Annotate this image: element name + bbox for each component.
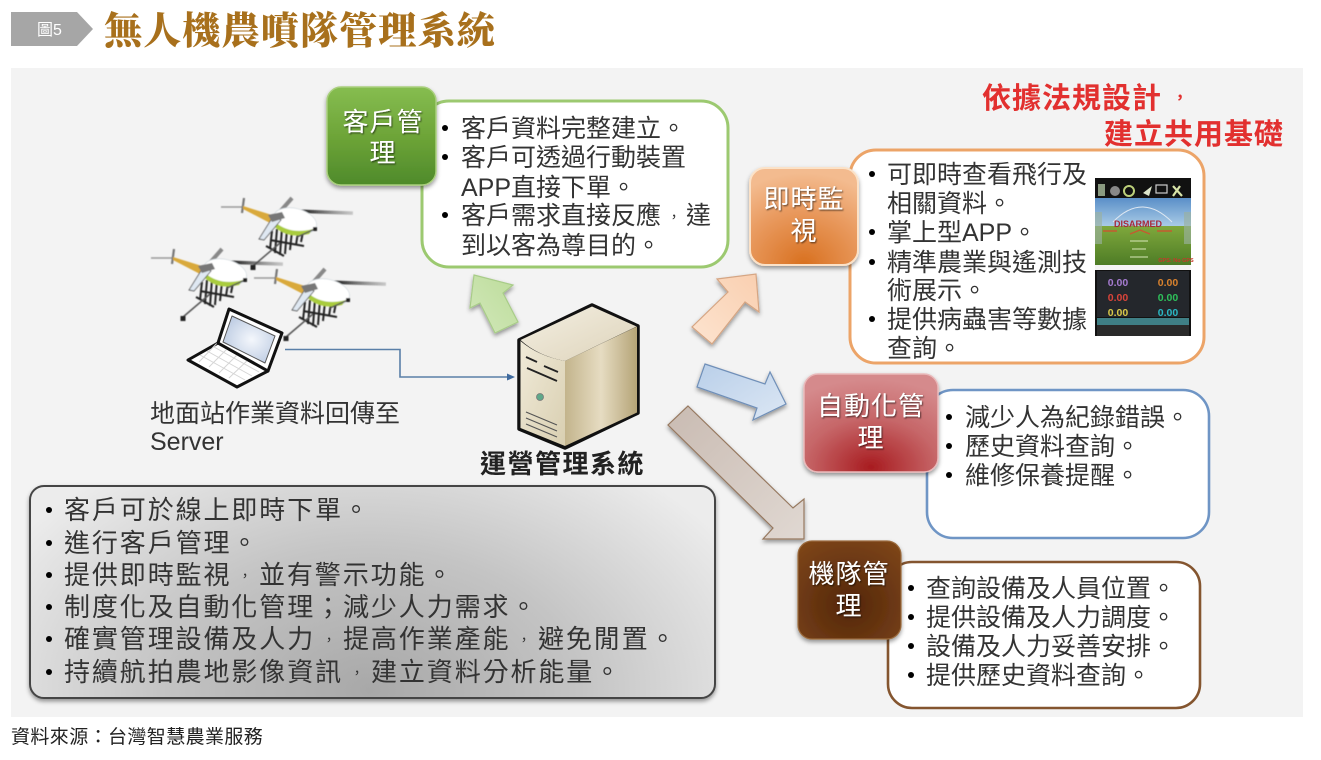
panel: system benefits: 提供即時監視 <box>64 560 231 590</box>
content box: fleet bullets: 設備及人力妥善安排。 <box>926 633 1176 661</box>
panel: system benefits: ， <box>350 665 364 681</box>
panel: system benefits: 提高作業產能 <box>343 624 510 654</box>
content box: customer bullets: APP直接下單。 <box>461 174 636 202</box>
app screenshot: GPS: No GPS <box>1158 258 1194 264</box>
panel: system benefits: 制度化及自動化管理；減少人力需求。 <box>64 592 538 622</box>
icon: drone 2 <box>151 249 283 321</box>
red note: regulation-based design: 建立共用基礎 <box>1104 118 1284 151</box>
app screenshot: 0.00 <box>1158 292 1178 304</box>
icon: server <box>519 305 638 448</box>
app screenshot <box>1095 178 1194 336</box>
content box: customer bullets <box>422 101 728 267</box>
panel: system benefits: 持續航拍農地影像資訊 <box>64 657 343 687</box>
panel: automated management <box>804 374 1209 538</box>
header: fleet management: 理 <box>835 591 863 621</box>
red note: regulation-based design: ， <box>1172 90 1188 107</box>
panel: system benefits: 確實管理設備及人力 <box>64 624 315 654</box>
source note: 資料來源：台灣智慧農業服務 <box>11 726 263 748</box>
title: 無人機農噴隊管理系統 <box>104 10 499 53</box>
app screenshot: 0.00 <box>1108 292 1128 304</box>
header: real-time monitoring: 即時監 <box>763 184 845 214</box>
figure badge <box>11 12 93 46</box>
header: automated management <box>804 374 938 472</box>
panel: system benefits: 建立資料分析能量。 <box>371 657 622 687</box>
content box: customer bullets: 到以客為尊目的。 <box>461 232 661 260</box>
panel: fleet management <box>798 541 1200 708</box>
header: customer management: 理 <box>369 138 397 168</box>
header: fleet management <box>798 541 901 639</box>
red note: regulation-based design <box>982 82 1284 151</box>
panel: system benefits: ， <box>517 632 531 648</box>
content box: fleet bullets <box>888 562 1200 708</box>
content box: customer bullets: 客戶資料完整建立。 <box>461 115 686 143</box>
panel: customer management <box>327 87 728 267</box>
app screenshot: 0.00 <box>1158 307 1178 319</box>
label: operations management system: 運營管理系統 <box>480 449 645 479</box>
app screenshot: DISARMED <box>1114 219 1162 229</box>
panel: system benefits: ， <box>322 632 336 648</box>
header: real-time monitoring: 視 <box>790 216 818 246</box>
app screenshot: 0.00 <box>1108 307 1128 319</box>
arrow: to customer management <box>470 275 518 333</box>
header: customer management: 客戶管 <box>342 107 424 137</box>
header: automated management: 自動化管 <box>817 391 925 421</box>
header: automated management: 理 <box>857 423 885 453</box>
content box: fleet bullets: 查詢設備及人員位置。 <box>926 575 1176 603</box>
content box: monitoring bullets <box>850 150 1204 363</box>
content box: customer bullets: 客戶需求直接反應 <box>461 202 661 230</box>
label: ground station data: 地面站作業資料回傳至 <box>150 400 400 428</box>
content box: fleet bullets: 提供設備及人力調度。 <box>926 604 1176 632</box>
content box: customer bullets: 客戶可透過行動裝置 <box>461 144 686 172</box>
content box: monitoring bullets: 可即時查看飛行及 <box>887 161 1087 189</box>
panel: system benefits: 客戶可於線上即時下單。 <box>64 495 371 525</box>
header: customer management <box>327 87 436 185</box>
arrow: to automated management <box>697 364 786 420</box>
content box: monitoring bullets: 掌上型APP。 <box>887 219 1037 247</box>
header: real-time monitoring <box>750 168 858 265</box>
icon: laptop <box>188 309 282 387</box>
panel: real-time monitoring <box>750 150 1204 363</box>
panel: system benefits: ， <box>238 568 252 584</box>
panel: system benefits <box>30 486 715 698</box>
content box: automation bullets: 減少人為紀錄錯誤。 <box>965 404 1190 432</box>
drone fleet <box>151 198 386 341</box>
content box: automation bullets: 維修保養提醒。 <box>965 462 1140 490</box>
label: ground station data <box>150 400 400 456</box>
red note: regulation-based design: 依據法規設計 <box>982 82 1162 115</box>
content box: customer bullets: ， <box>667 209 681 225</box>
panel: system benefits: 避免閒置。 <box>538 624 678 654</box>
content box: automation bullets <box>927 390 1209 538</box>
content box: automation bullets: 歷史資料查詢。 <box>965 433 1140 461</box>
icon: drone 3 <box>254 269 386 341</box>
panel: system benefits: 並有警示功能。 <box>259 560 454 590</box>
content box: monitoring bullets: 精準農業與遙測技 <box>887 249 1087 277</box>
arrow: to fleet management <box>668 406 804 539</box>
content box: customer bullets: 達 <box>686 202 711 230</box>
content box: monitoring bullets: 提供病蟲害等數據 <box>887 306 1087 334</box>
content box: fleet bullets: 提供歷史資料查詢。 <box>926 662 1151 690</box>
header: fleet management: 機隊管 <box>808 559 890 589</box>
app screenshot: 0.00 <box>1108 277 1128 289</box>
content box: monitoring bullets: 相關資料。 <box>887 190 1012 218</box>
content box: monitoring bullets: 術展示。 <box>887 277 987 305</box>
figure badge: 圖5 <box>37 22 62 39</box>
content box: monitoring bullets: 查詢。 <box>887 335 962 363</box>
connector arrow: ground station to server <box>285 350 515 380</box>
panel: system benefits: 進行客戶管理。 <box>64 528 259 558</box>
label: ground station data: Server <box>150 428 224 456</box>
app screenshot: 0.00 <box>1158 277 1178 289</box>
arrow: to real-time monitoring <box>692 274 759 344</box>
icon: drone 1 <box>221 198 353 270</box>
